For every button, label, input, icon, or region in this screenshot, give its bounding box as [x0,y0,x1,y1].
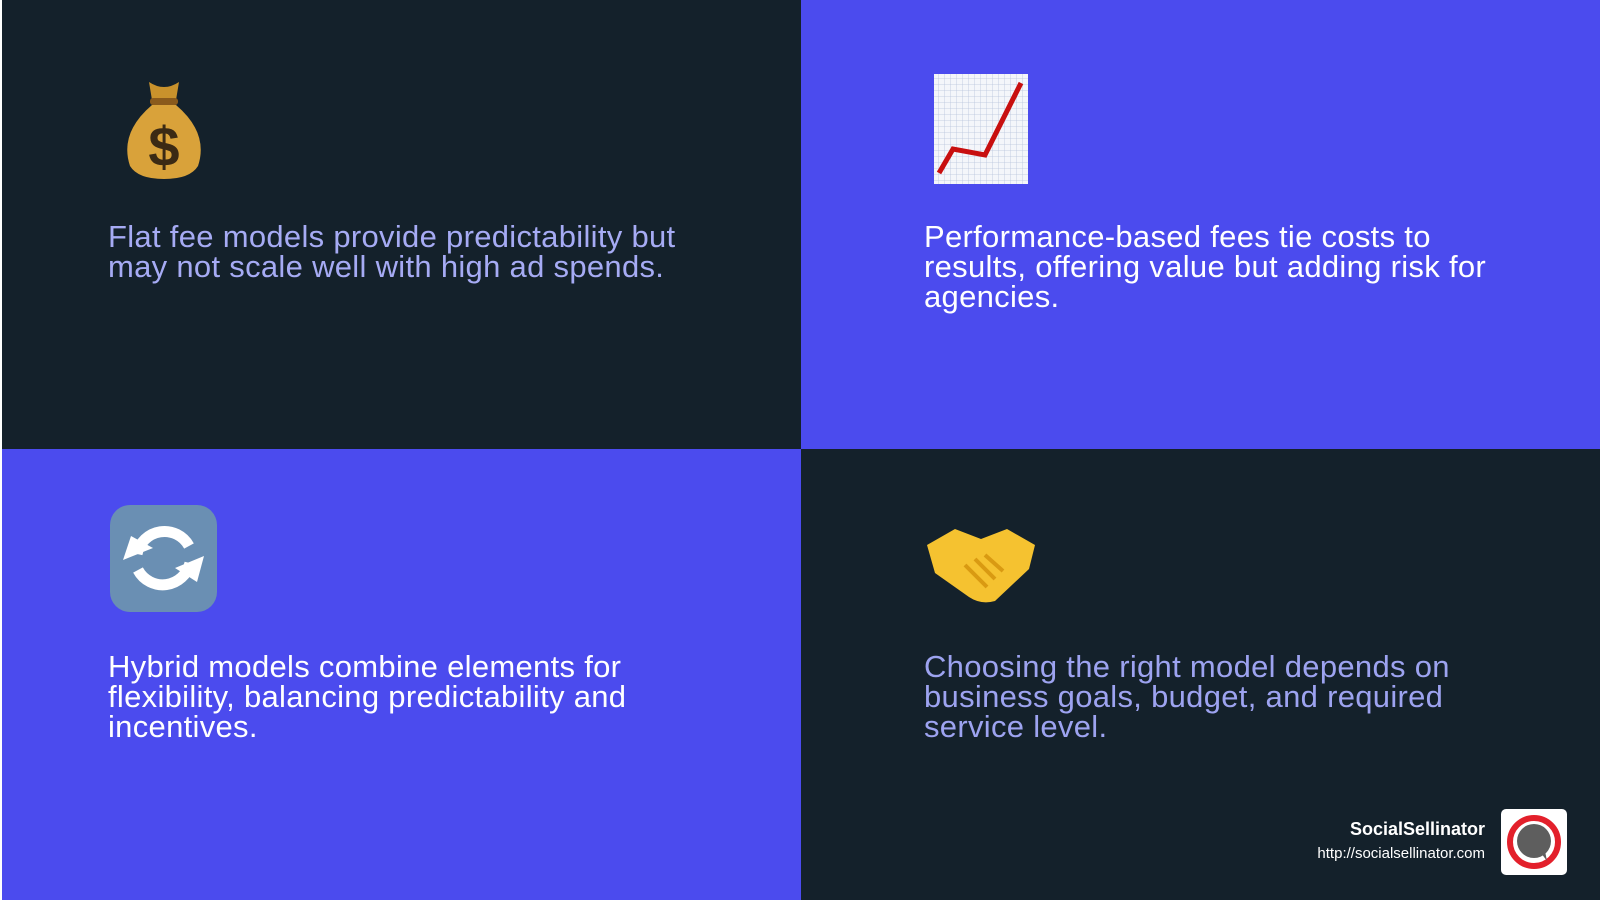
text: hybrid [108,649,626,744]
text: flat fee: Flat fee models provide predictability but [108,219,675,254]
icon: refresh [110,505,217,612]
text: choosing: Choosing the right model depends on [924,649,1450,684]
icon: money bag [127,82,201,179]
text: choosing [924,649,1450,744]
text: choosing: business goals, budget, and required [924,679,1443,714]
text: flat fee: may not scale well with high ad spends. [108,249,664,284]
panel: choosing [801,449,1600,900]
panel: performance [801,0,1600,449]
text: performance [924,219,1486,314]
logo [1501,809,1567,875]
text: performance: results, offering value but adding risk for [924,249,1486,284]
text: flat fee [108,219,675,284]
text: performance: agencies. [924,279,1059,314]
icon: handshake [927,529,1035,602]
panel: hybrid [2,449,801,900]
text: hybrid: incentives. [108,709,258,744]
panel: flat fee [2,0,801,449]
icon: money bag: $ [148,115,180,178]
text: choosing: service level. [924,709,1107,744]
brand text [1317,819,1485,862]
brand text: SocialSellinator [1350,819,1485,839]
icon: chart [934,74,1028,184]
text: performance: Performance-based fees tie costs to [924,219,1431,254]
text: hybrid: Hybrid models combine elements for [108,649,621,684]
brand text: http://socialsellinator.com [1317,845,1485,862]
text: hybrid: flexibility, balancing predictability and [108,679,626,714]
